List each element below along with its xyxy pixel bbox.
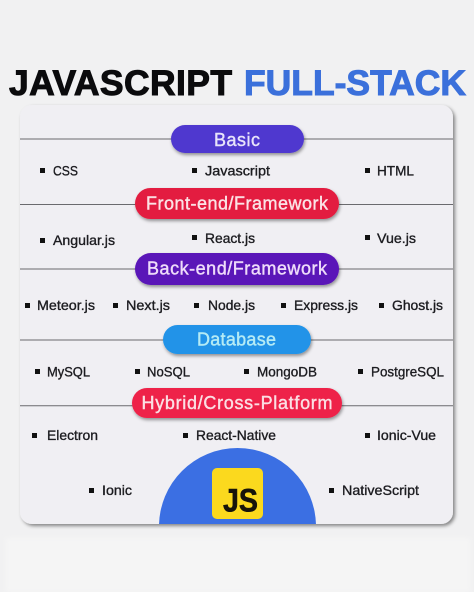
section: Front-end/Framework: Vue.js	[377, 230, 416, 246]
section: Database: Database	[197, 330, 276, 350]
section: Hybrid/Cross-Platform: NativeScript	[342, 482, 419, 498]
section: Basic: CSS	[53, 162, 78, 178]
icon: JS logo	[212, 468, 263, 519]
section: Basic: Basic	[214, 130, 260, 150]
section: Hybrid/Cross-Platform: Ionic	[102, 482, 132, 498]
title: JAVASCRIPT	[9, 63, 232, 103]
section: Front-end/Framework: Angular.js	[53, 232, 115, 248]
section: Front-end/Framework: Front-end/Framework	[146, 194, 329, 214]
section: Back-end/Framework	[20, 253, 453, 313]
section: Back-end/Framework: Node.js	[208, 297, 255, 313]
section: Database	[20, 325, 453, 380]
section: Back-end/Framework: Next.js	[126, 297, 170, 313]
panel: stack card	[20, 104, 458, 528]
section: Back-end/Framework: Express.js	[294, 297, 358, 313]
section: Hybrid/Cross-Platform: Electron	[47, 427, 98, 443]
icon: JS logo: JS	[223, 482, 258, 518]
section: Front-end/Framework: React.js	[205, 230, 255, 246]
section: Hybrid/Cross-Platform: Hybrid/Cross-Platform	[142, 393, 332, 413]
section: Back-end/Framework: Back-end/Framework	[147, 258, 328, 278]
section: Basic: Javascript	[205, 162, 270, 178]
section: Hybrid/Cross-Platform	[20, 388, 453, 498]
section: Front-end/Framework	[20, 188, 453, 248]
title: FULL-STACK	[244, 63, 466, 103]
icon: blue semicircle	[159, 448, 316, 524]
section: Database: PostgreSQL	[371, 364, 444, 380]
section: Database: NoSQL	[147, 364, 190, 380]
section: Hybrid/Cross-Platform: Ionic-Vue	[377, 427, 436, 443]
section: Basic	[20, 125, 453, 178]
section: Hybrid/Cross-Platform: React-Native	[196, 427, 276, 443]
section: Basic: HTML	[377, 162, 414, 178]
section: Back-end/Framework: Meteor.js	[37, 297, 95, 313]
section: Database: MongoDB	[257, 364, 317, 380]
section: Back-end/Framework: Ghost.js	[392, 297, 443, 313]
section: Database: MySQL	[47, 364, 90, 380]
title	[9, 63, 466, 103]
